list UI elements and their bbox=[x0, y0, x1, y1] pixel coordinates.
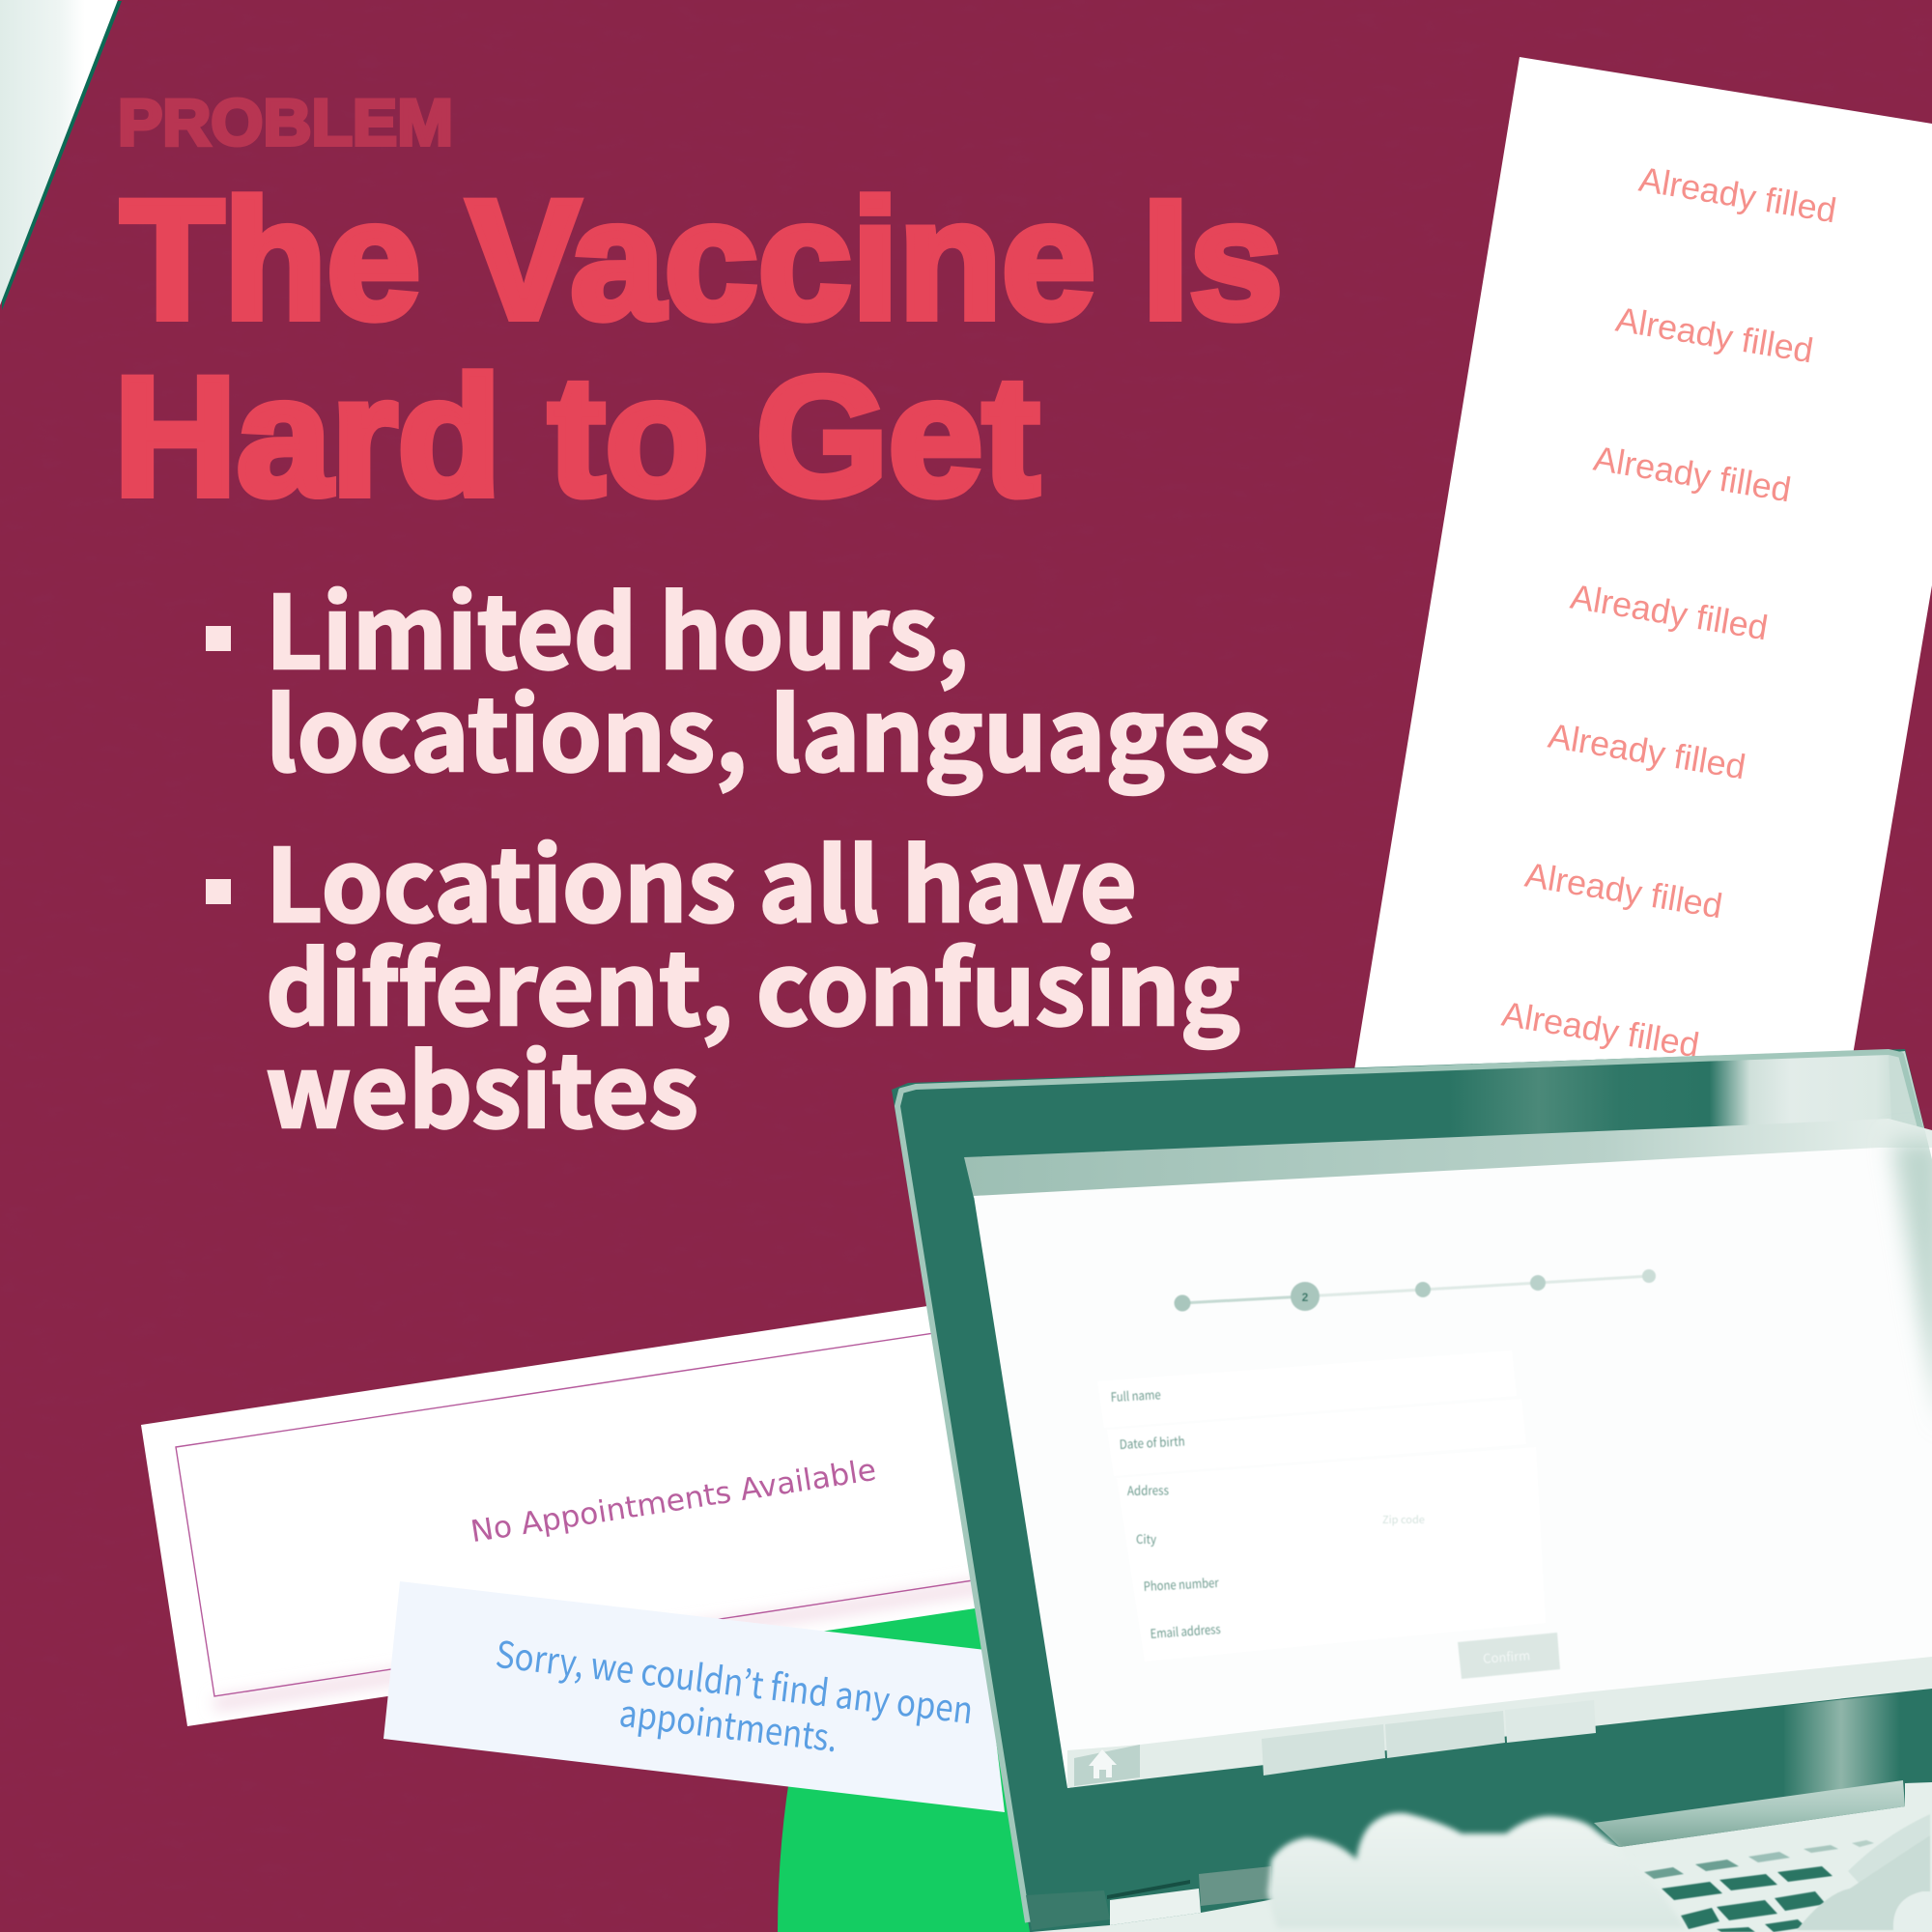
laptop lid bbox=[892, 1049, 1932, 1932]
progress stepper bbox=[1175, 1269, 1656, 1312]
icon: home bbox=[1089, 1749, 1117, 1778]
panel: sorry message: appointments. bbox=[617, 1684, 840, 1762]
panel: already filled list: Already filled bbox=[1522, 855, 1725, 925]
bullet list bbox=[206, 552, 1270, 1156]
form fields bbox=[1097, 1350, 1546, 1662]
laptop photo bbox=[892, 1049, 1932, 1932]
laptop screen bbox=[964, 1119, 1932, 1788]
keyboard deck bbox=[1032, 1780, 1932, 1932]
form labels: Phone number bbox=[1143, 1573, 1220, 1595]
panel: already filled list: Already filled bbox=[1499, 994, 1702, 1065]
keyboard keys bbox=[1644, 1840, 1874, 1932]
panel: already filled list: Already filled bbox=[1591, 439, 1794, 509]
green circle shape bbox=[778, 1584, 1063, 1932]
form labels bbox=[1110, 1384, 1425, 1642]
bullet: limited hours bbox=[206, 552, 1270, 800]
label: problem: PROBLEM bbox=[118, 86, 453, 159]
panel: already filled list bbox=[1352, 57, 1932, 1082]
title: The Vaccine Is bbox=[121, 166, 1283, 355]
panel: sorry message bbox=[384, 1581, 1005, 1812]
hands bbox=[1267, 1813, 1930, 1930]
panel: no appointments available: No Appointments Available bbox=[469, 1453, 878, 1549]
form labels: Date of birth bbox=[1119, 1431, 1185, 1453]
panel: already filled list: Already filled bbox=[1636, 159, 1839, 230]
left hand bbox=[1267, 1813, 1686, 1928]
form labels: City bbox=[1136, 1529, 1156, 1548]
bullet: confusing websites: different, confusing bbox=[266, 908, 1240, 1054]
confirm button: Confirm bbox=[1483, 1645, 1531, 1667]
panel: no appointments available bbox=[141, 1300, 1014, 1726]
form labels: Email address bbox=[1150, 1619, 1221, 1642]
title: Hard to Get bbox=[114, 343, 1039, 531]
form labels: Zip code bbox=[1382, 1512, 1425, 1527]
panel: sorry message: Sorry, we couldn’t find any open bbox=[494, 1625, 977, 1734]
bullet: confusing websites: Locations all have bbox=[266, 805, 1137, 951]
form labels: Full name bbox=[1110, 1384, 1161, 1406]
confirm button bbox=[1458, 1633, 1560, 1679]
title bbox=[114, 166, 1283, 531]
laptop hinge bbox=[1026, 1866, 1271, 1930]
panel: already filled list: Already filled bbox=[1568, 577, 1771, 647]
bottom tab bar bbox=[1067, 1657, 1932, 1788]
corner photo fragment bbox=[0, 0, 122, 310]
bullet: limited hours: locations, languages bbox=[266, 654, 1270, 800]
progress stepper: 2 bbox=[1302, 1291, 1309, 1304]
panel: already filled list: Already filled bbox=[1613, 299, 1816, 370]
panel: already filled list: Already filled bbox=[1546, 716, 1748, 786]
bullet: confusing websites bbox=[206, 805, 1240, 1156]
right hand fingers bbox=[1797, 1814, 1930, 1930]
bullet: limited hours: Limited hours, bbox=[266, 552, 969, 697]
bullet: confusing websites: websites bbox=[266, 1010, 698, 1156]
form labels: Address bbox=[1127, 1480, 1169, 1499]
